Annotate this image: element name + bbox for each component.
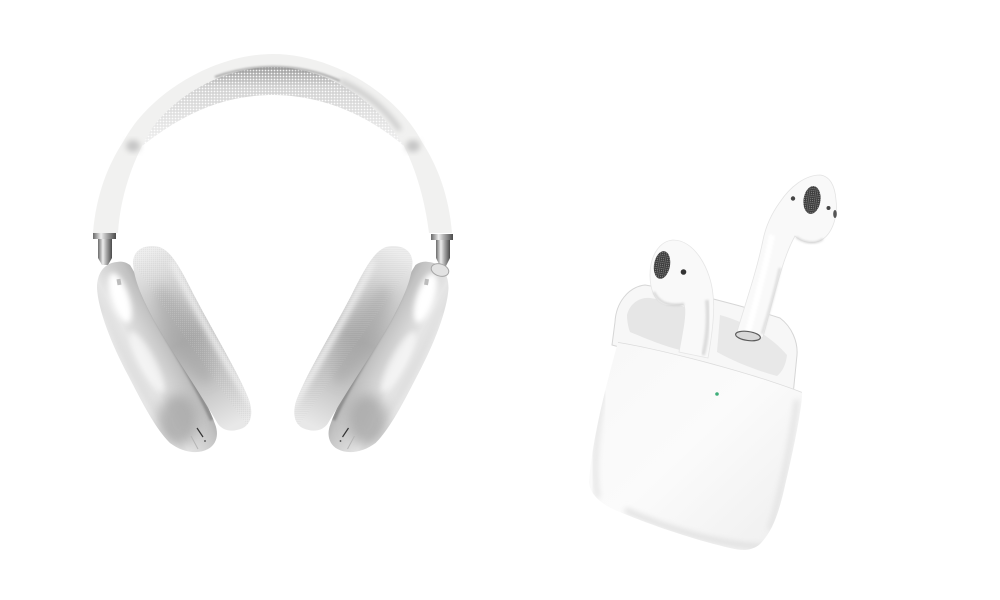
case body <box>589 342 802 550</box>
headphones <box>93 54 453 452</box>
left stem <box>93 233 116 265</box>
right ear cup <box>286 240 448 452</box>
status light <box>715 392 719 396</box>
right earbud <box>735 175 837 342</box>
headband <box>93 54 452 233</box>
digital crown <box>430 262 450 278</box>
illustration: headphones and earbuds <box>93 54 837 550</box>
silver tip <box>735 330 761 342</box>
earbuds and case <box>589 175 837 550</box>
right stem <box>431 234 453 266</box>
left earbud <box>650 240 714 358</box>
left ear cup <box>97 240 260 452</box>
case rim and cavity <box>612 285 797 395</box>
